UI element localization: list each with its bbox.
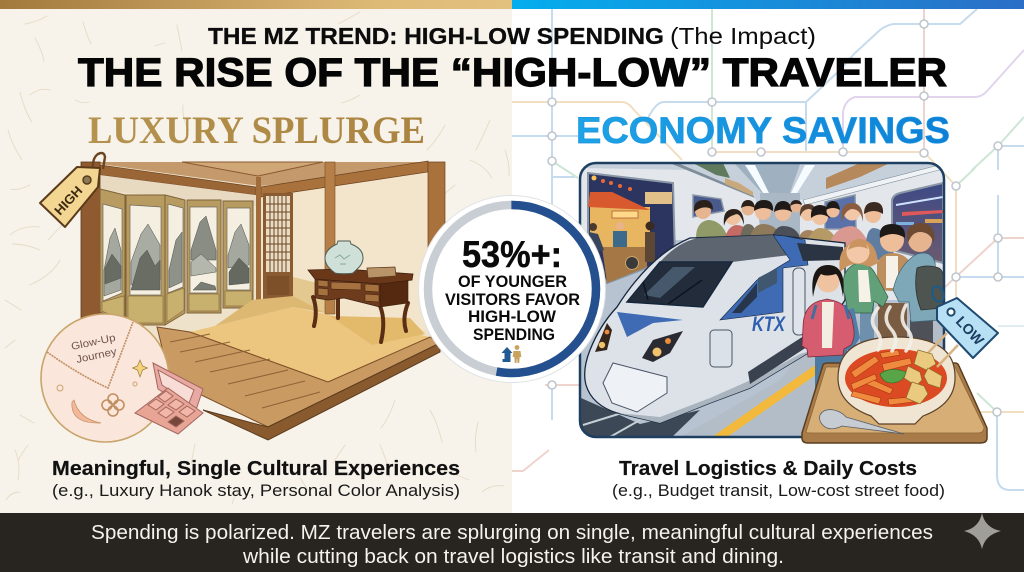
stat label: HIGH-LOW xyxy=(468,307,557,326)
kicker heading: THE MZ TREND: HIGH-LOW SPENDING xyxy=(208,23,664,49)
stat label: VISITORS FAVOR xyxy=(445,290,580,309)
headlights xyxy=(595,323,612,352)
kicker heading: (The Impact) xyxy=(670,23,816,49)
tag: LOW xyxy=(930,285,998,358)
top accent bar: economy blue xyxy=(512,0,1024,9)
fish cakes xyxy=(904,350,942,404)
dark roof xyxy=(660,235,790,262)
ceiling xyxy=(100,162,428,186)
folding screen paper xyxy=(103,204,250,301)
inset: glow-up journey xyxy=(41,314,169,442)
caption: economy headline: Travel Logistics & Daily Costs xyxy=(619,458,917,480)
top accent bar: luxury gold xyxy=(0,0,512,9)
scallions xyxy=(880,369,906,383)
donut ring track xyxy=(428,205,596,373)
caption: economy examples: (e.g., Budget transit, Low-cost street food) xyxy=(612,482,945,500)
footer text xyxy=(91,522,933,568)
KTX logo: KTX xyxy=(752,313,787,336)
wood deck xyxy=(157,327,440,427)
crescent charm xyxy=(72,400,101,423)
friend in green jacket xyxy=(839,239,888,342)
back walls xyxy=(81,162,445,430)
inset: glow-up journey: Journey xyxy=(75,346,119,366)
bowl xyxy=(838,337,955,424)
sparkle xyxy=(132,360,148,377)
roof vents xyxy=(797,243,843,261)
inset: glow-up journey: Glow-Up xyxy=(70,332,117,353)
lacquer box xyxy=(367,267,396,278)
KTX bullet train xyxy=(585,235,845,423)
folding screen frames xyxy=(100,189,253,325)
carriage end door xyxy=(760,193,800,235)
luggage racks xyxy=(672,164,755,198)
street food window xyxy=(588,173,675,283)
main title: THE RISE OF THE “HIGH-LOW” TRAVELER xyxy=(78,51,947,95)
caption: luxury examples: (e.g., Luxury Hanok stay, Personal Color Analysis) xyxy=(52,482,460,500)
footer text: while cutting back on travel logistics like transit and dining. xyxy=(242,546,784,568)
heading: economy savings: ECONOMY SAVINGS xyxy=(576,110,950,151)
background crowd xyxy=(694,200,895,260)
donut ring value xyxy=(428,205,596,373)
small windows xyxy=(693,195,724,217)
desk xyxy=(308,269,413,342)
icon: arrow and person xyxy=(502,345,521,363)
platform floor xyxy=(680,300,943,437)
necklace xyxy=(47,322,133,416)
screen mountain paintings xyxy=(104,216,249,296)
footer banner xyxy=(0,513,1024,572)
heading: luxury splurge: LUXURY SPLURGE xyxy=(88,109,425,152)
food tray xyxy=(802,305,987,443)
spoon xyxy=(820,410,904,434)
friend in brown jacket xyxy=(877,224,910,343)
steam xyxy=(872,305,911,351)
platform front xyxy=(203,343,440,440)
tag: LOW: LOW xyxy=(952,314,986,349)
icon: sparkle xyxy=(964,513,1001,549)
stat label xyxy=(445,272,580,344)
lattice door xyxy=(263,193,293,299)
windshield xyxy=(627,262,732,307)
celadon vase xyxy=(325,241,363,274)
lower nose seam xyxy=(603,363,667,412)
blue side stripe xyxy=(720,235,808,320)
skewers xyxy=(928,333,958,367)
rice cakes xyxy=(851,350,913,405)
stat label: SPENDING xyxy=(473,325,555,344)
stat label: OF YOUNGER xyxy=(458,272,567,291)
icon: makeup palette xyxy=(135,363,203,434)
side windows xyxy=(732,283,757,313)
tatami floor xyxy=(190,307,430,382)
folding screen lower panels xyxy=(102,288,252,323)
tag: HIGH xyxy=(40,153,105,227)
blue nose accent xyxy=(617,312,683,337)
right window with motion lights xyxy=(892,183,943,263)
panel: luxury paper background xyxy=(0,0,512,514)
illustration: KTX train interior xyxy=(580,163,944,437)
carriage walls xyxy=(581,168,762,240)
foreground traveller in pink jacket xyxy=(802,265,860,400)
illustration: hanok room xyxy=(81,161,445,440)
center stat badge: 53%+ xyxy=(418,196,606,382)
wooden beams xyxy=(100,165,256,195)
panel: economy subway-map background xyxy=(512,0,1024,514)
stat number: 53%+: xyxy=(462,234,562,275)
carriage ceiling xyxy=(581,164,943,205)
footer text: Spending is polarized. MZ travelers are splurging on single, meaningful cultural experiences xyxy=(91,522,933,544)
door xyxy=(793,268,805,335)
caption: luxury headline: Meaningful, Single Cultural Experiences xyxy=(52,458,460,480)
friend in teal hoodie with backpack xyxy=(893,223,944,343)
tag: HIGH: HIGH xyxy=(51,183,85,218)
